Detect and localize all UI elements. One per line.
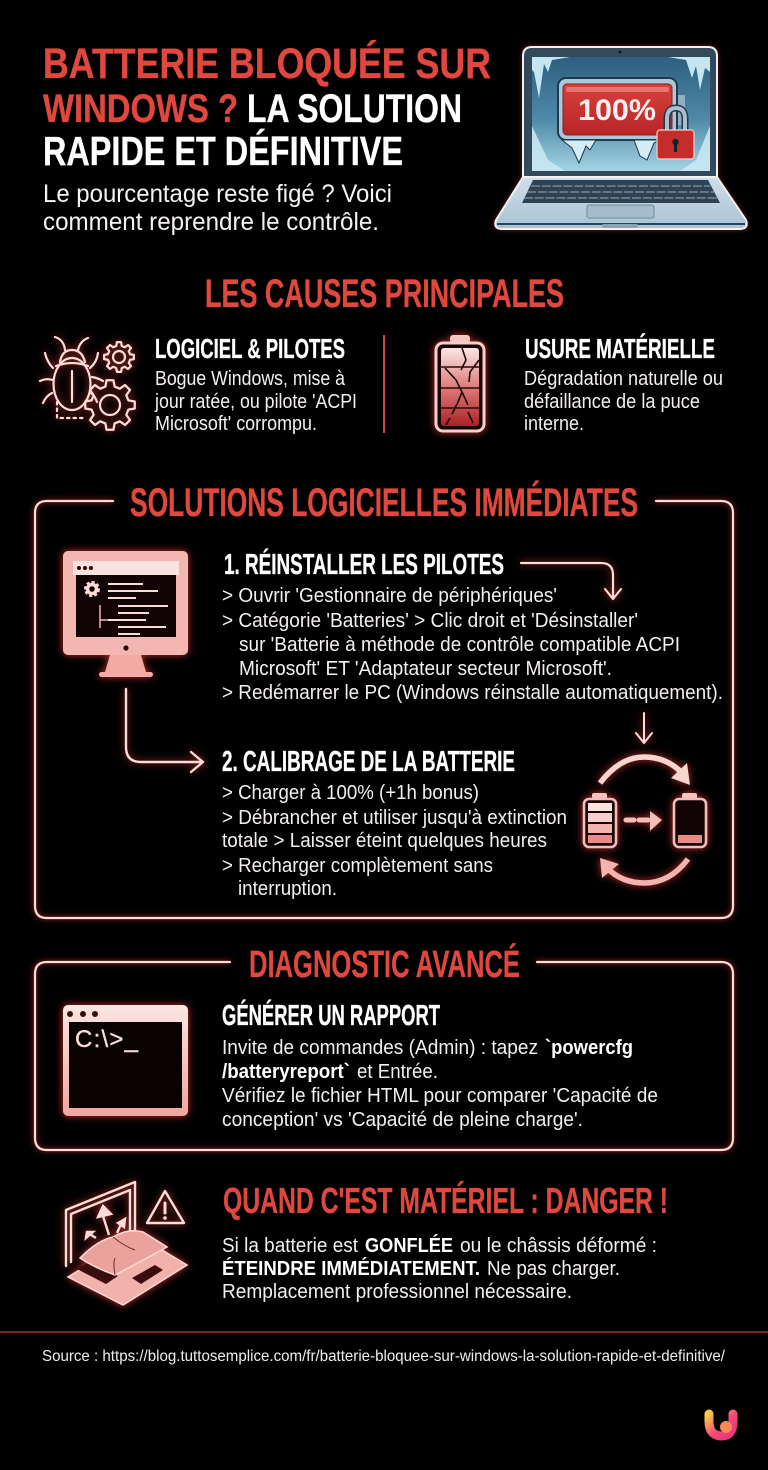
step 2: battery calibration: [222, 746, 567, 900]
step 2: battery calibration: 2. CALIBRAGE DE LA BATTERIE: [222, 746, 515, 778]
report instructions: /batteryreport`: [222, 1061, 350, 1083]
title: BATTERIE BLOQUÉE SUR: [43, 40, 491, 88]
title: WINDOWS ?: [43, 87, 238, 131]
title: LA SOLUTION: [247, 87, 462, 131]
icon: command prompt window: [63, 1005, 188, 1116]
danger callout: ou le châssis déformé :: [460, 1235, 657, 1257]
heading: advanced diagnostics: DIAGNOSTIC AVANCÉ: [249, 942, 520, 986]
danger callout: Ne pas charger.: [487, 1258, 620, 1280]
subtitle: comment reprendre le contrôle.: [43, 208, 379, 236]
report instructions: Invite de commandes (Admin) : tapez: [222, 1037, 538, 1059]
icon: frozen laptop at 100%: 100%: [578, 94, 656, 127]
subtitle: [43, 180, 392, 236]
cause: software and drivers: LOGICIEL & PILOTES: [155, 333, 345, 364]
arrow: down to calibration icon: [636, 713, 652, 743]
danger callout: [222, 1180, 668, 1303]
danger callout: GONFLÉE: [365, 1234, 453, 1257]
subtitle: Le pourcentage reste figé ? Voici: [43, 180, 392, 208]
danger callout: Remplacement professionnel nécessaire.: [222, 1281, 572, 1303]
icon: monitor with settings: [63, 551, 188, 677]
icon: bug and gears: [40, 337, 135, 430]
cause: hardware wear: défaillance de la puce: [524, 391, 700, 413]
title: [43, 40, 491, 174]
panel: software solutions: [35, 480, 733, 918]
step 1: reinstall drivers: > Ouvrir 'Gestionnaire de périphériques': [222, 585, 557, 607]
step 2: battery calibration: > Débrancher et utiliser jusqu'à extinction: [222, 807, 567, 829]
cause: software and drivers: jour ratée, ou pilote 'ACPI: [154, 391, 357, 413]
icon: calibration cycle: [584, 757, 706, 883]
cause: hardware wear: interne.: [524, 413, 584, 435]
step 2: battery calibration: > Charger à 100% (+1h bonus): [222, 782, 479, 804]
title: RAPIDE ET DÉFINITIVE: [43, 128, 403, 174]
danger callout: Si la batterie est: [222, 1235, 358, 1257]
cause: software and drivers: Microsoft' corrompu.: [155, 413, 317, 435]
icon: brand logo: [709, 1414, 733, 1436]
step 1: reinstall drivers: Microsoft' ET 'Adaptateur secteur Microsoft'.: [239, 658, 612, 680]
icon: swollen battery laptop with warning: [66, 1182, 187, 1305]
danger callout: ÉTEINDRE IMMÉDIATEMENT.: [222, 1257, 480, 1280]
step 1: reinstall drivers: [222, 547, 723, 704]
arrow: step 1 heading: [521, 563, 621, 599]
report instructions: `powercfg: [545, 1037, 633, 1059]
cause: software and drivers: Bogue Windows, mise à: [155, 368, 346, 390]
step 1: reinstall drivers: > Catégorie 'Batteries' > Clic droit et 'Désinstaller': [222, 610, 638, 632]
cause: hardware wear: Dégradation naturelle ou: [524, 368, 723, 390]
step 2: battery calibration: > Recharger complètement sans: [222, 855, 493, 877]
icon: cracked battery: [436, 335, 484, 431]
cause: hardware wear: [524, 333, 723, 435]
report instructions: conception' vs 'Capacité de pleine charge'.: [222, 1109, 583, 1131]
report instructions: Vérifiez le fichier HTML pour comparer 'Capacité de: [222, 1085, 658, 1107]
panel: advanced diagnostics: [35, 942, 733, 1150]
step 1: reinstall drivers: > Redémarrer le PC (Windows réinstalle automatiquement).: [222, 682, 723, 704]
cause: software and drivers: [154, 333, 357, 435]
report instructions: GÉNÉRER UN RAPPORT: [222, 998, 440, 1032]
icon: frozen laptop at 100%: [495, 47, 747, 229]
report instructions: et Entrée.: [357, 1061, 438, 1083]
step 1: reinstall drivers: 1. RÉINSTALLER LES PILOTES: [224, 547, 504, 581]
step 1: reinstall drivers: sur 'Batterie à méthode de contrôle compatible ACPI: [239, 634, 680, 656]
source line: Source : https://blog.tuttosemplice.com/fr/batterie-bloquee-sur-windows-la-solution-rapide-et-definitive/: [42, 1348, 726, 1365]
step 2: battery calibration: interruption.: [238, 878, 337, 900]
heading: causes: LES CAUSES PRINCIPALES: [205, 272, 564, 316]
step 2: battery calibration: totale > Laisser éteint quelques heures: [222, 830, 547, 852]
icon: command prompt window: C:\>_: [75, 1026, 139, 1053]
report instructions: [222, 998, 658, 1131]
arrow: monitor to calibration: [126, 689, 203, 772]
